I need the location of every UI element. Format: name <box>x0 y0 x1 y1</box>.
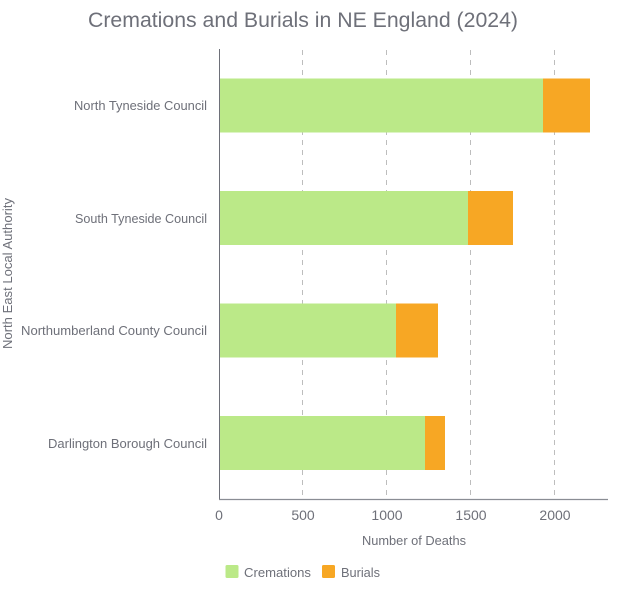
legend: Burials <box>341 566 380 580</box>
x axis tick labels: 500 <box>291 507 315 523</box>
y axis category labels: North Tyneside Council <box>74 99 207 113</box>
bar: Northumberland County Council <box>219 304 438 358</box>
x axis tick labels: 0 <box>215 507 223 523</box>
bar: South Tyneside Council <box>219 191 513 245</box>
y axis category labels <box>21 99 207 451</box>
bar: Darlington Borough Council <box>219 416 445 470</box>
x axis title: Number of Deaths <box>362 534 466 548</box>
title: Cremations and Burials in NE England (2024) <box>88 9 518 32</box>
x axis tick labels: 1500 <box>455 507 487 523</box>
x axis tick labels <box>215 507 571 523</box>
legend <box>226 565 380 580</box>
y axis line <box>218 49 220 500</box>
legend: Cremations <box>244 566 311 580</box>
y axis category labels: Northumberland County Council <box>21 324 207 338</box>
y axis title: North East Local Authority <box>1 197 15 349</box>
x axis line <box>219 498 608 500</box>
x axis tick labels: 1000 <box>371 507 403 523</box>
y axis category labels: South Tyneside Council <box>75 212 207 226</box>
x axis tick labels: 2000 <box>539 507 571 523</box>
y axis category labels: Darlington Borough Council <box>48 437 207 451</box>
bar: North Tyneside Council <box>219 78 590 132</box>
